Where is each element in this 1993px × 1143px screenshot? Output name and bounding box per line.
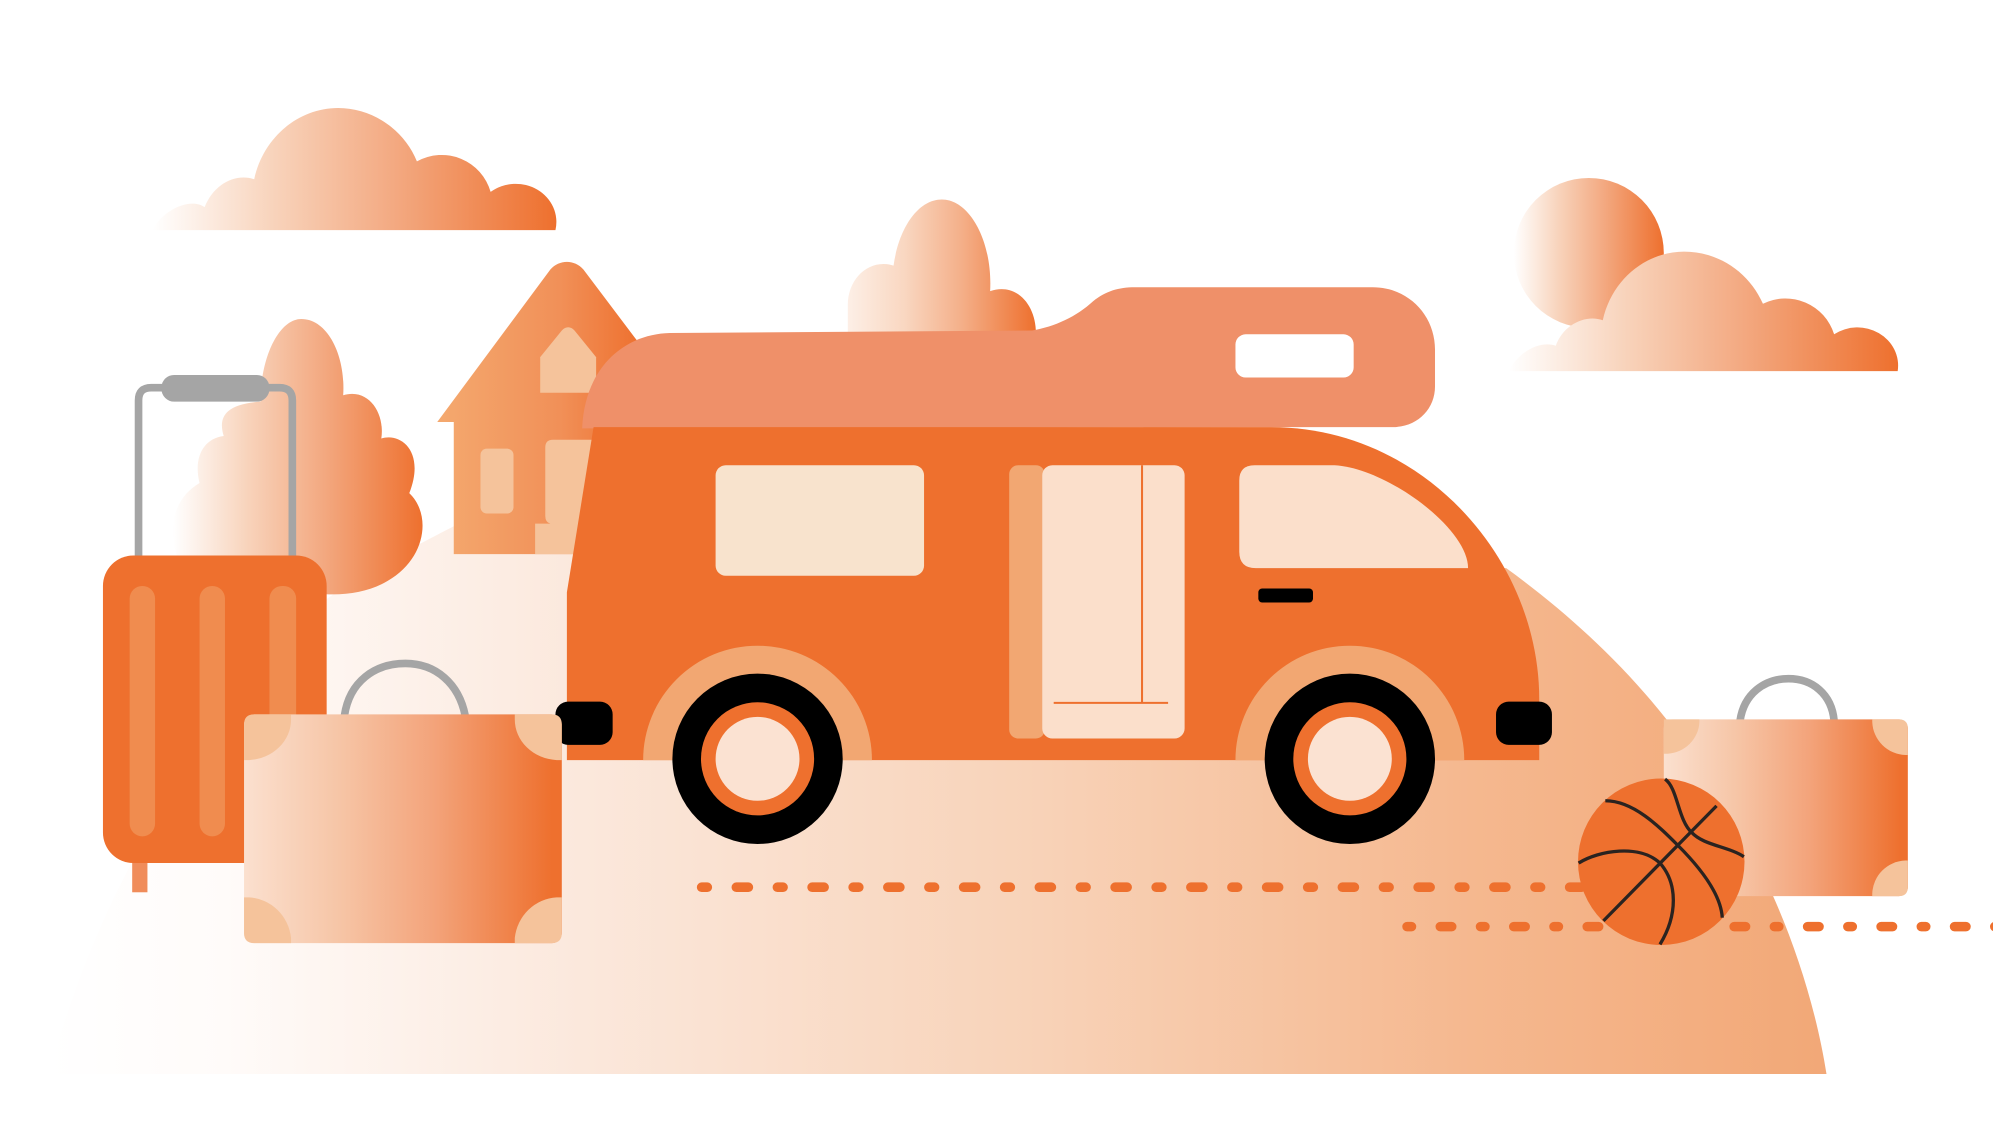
suitcase body: [103, 555, 327, 863]
van side window: [716, 465, 924, 576]
cloud: right front: [1509, 252, 1898, 371]
van roof cabin: [582, 287, 1435, 428]
suitcase ribs: [130, 586, 296, 836]
house door: [535, 440, 597, 554]
dotted road line: upper: [702, 883, 1589, 891]
front headlight: [1496, 702, 1552, 745]
van door: [1042, 465, 1185, 738]
corner guards: [244, 714, 562, 943]
handle: [344, 663, 465, 716]
rear wheel: [643, 646, 872, 844]
tree: [173, 319, 423, 594]
dotted road line: lower: [1407, 923, 1993, 930]
basketball: [1578, 779, 1745, 945]
small suitcase right: [1664, 679, 1908, 896]
van roof window: [1235, 334, 1354, 378]
van front window: [1239, 465, 1468, 568]
cloud: top centre: [848, 200, 1036, 333]
body: [244, 714, 562, 943]
cloud: right back round: [1514, 178, 1664, 328]
house side window: [480, 449, 514, 514]
house: [437, 262, 642, 554]
body: [1664, 719, 1908, 896]
ball seams: [1579, 779, 1744, 944]
front wheel: [1235, 646, 1464, 844]
handle: [1740, 679, 1834, 721]
cloud: top left: [153, 108, 556, 230]
tall rolling suitcase: [103, 375, 327, 892]
rear light: [555, 702, 613, 745]
house attic window: [540, 327, 596, 393]
van body: [567, 427, 1539, 760]
suitcase handle: [139, 375, 292, 555]
camper van: [555, 287, 1552, 844]
corner guards: [1664, 719, 1908, 896]
van door handle: [1258, 589, 1313, 602]
suitcase wheel: [132, 861, 147, 892]
van door strip: [1009, 465, 1045, 738]
hill: [48, 526, 1826, 1074]
small suitcase left: [244, 663, 562, 943]
